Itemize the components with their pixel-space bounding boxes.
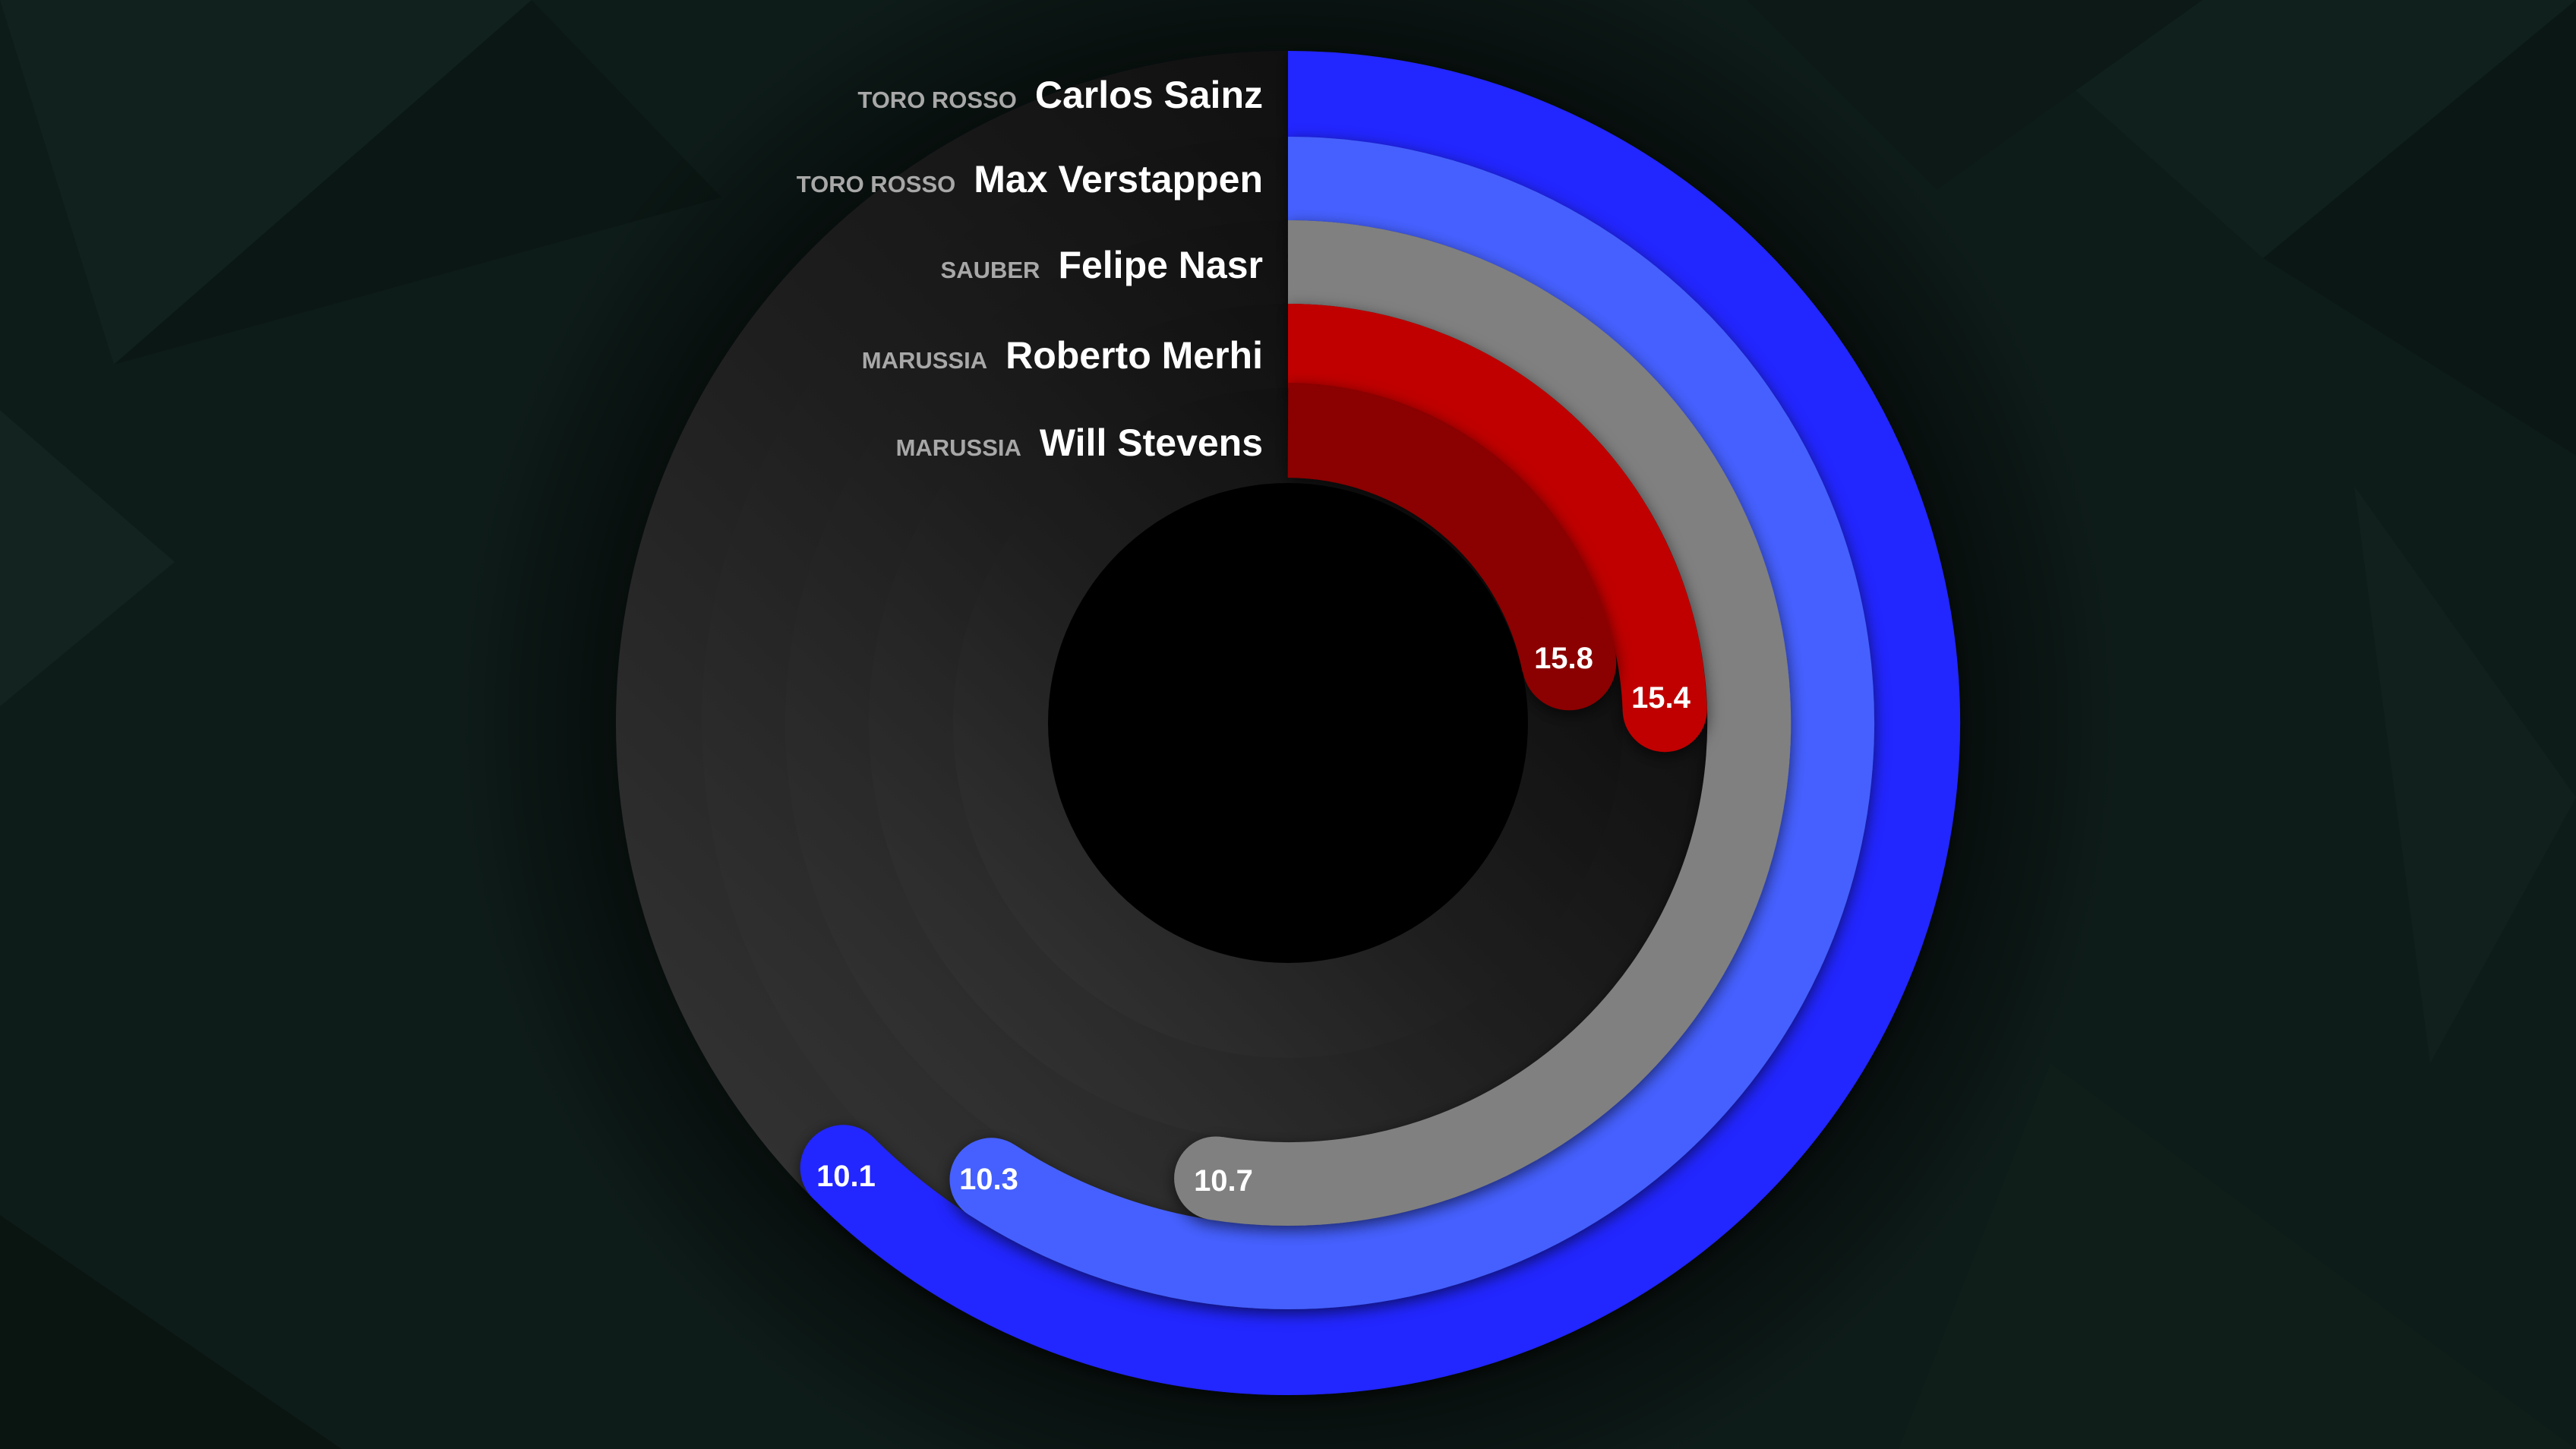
arc: Will Stevens 15.8 bbox=[1288, 430, 1616, 710]
driver labels: SAUBER Felipe Nasr bbox=[941, 244, 1263, 286]
value labels: 10.3 bbox=[959, 1163, 1018, 1196]
value labels: 10.1 bbox=[816, 1160, 876, 1193]
tracks bbox=[616, 51, 1960, 1395]
value labels bbox=[816, 642, 1691, 1198]
driver labels bbox=[797, 74, 1263, 464]
arc: Max Verstappen 10.3 bbox=[949, 178, 1833, 1267]
driver labels: MARUSSIA Will Stevens bbox=[896, 421, 1263, 464]
center hole bbox=[1048, 483, 1528, 963]
value labels: 15.4 bbox=[1631, 681, 1691, 715]
driver labels: MARUSSIA Roberto Merhi bbox=[862, 334, 1263, 377]
arc: Felipe Nasr 10.7 bbox=[1174, 262, 1749, 1220]
arc: Roberto Merhi 15.4 bbox=[1288, 346, 1707, 752]
driver labels: TORO ROSSO Carlos Sainz bbox=[857, 74, 1263, 116]
arc: Carlos Sainz 10.1 bbox=[800, 94, 1918, 1353]
chart: radial bars bbox=[616, 51, 1960, 1395]
value labels: 10.7 bbox=[1194, 1164, 1253, 1198]
value labels: 15.8 bbox=[1534, 642, 1593, 675]
driver labels: TORO ROSSO Max Verstappen bbox=[797, 158, 1263, 200]
